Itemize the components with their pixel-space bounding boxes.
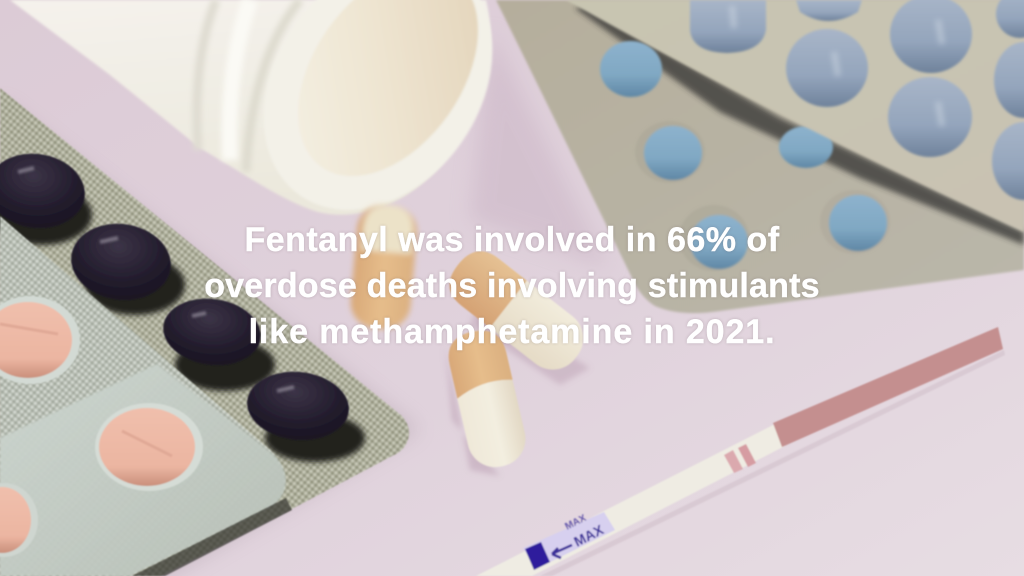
test strip	[476, 327, 1005, 576]
blue tablets	[600, 41, 890, 271]
blister pack: back, blue tablets	[496, 0, 1024, 313]
front foil with pink tablets	[0, 216, 292, 576]
test lines	[724, 450, 743, 473]
blister pack: left, dark capsules and pink tablets	[0, 88, 420, 576]
capsule: lower vertical	[443, 325, 531, 476]
capsule: upright, behind	[349, 203, 419, 331]
bottle ribs	[197, 0, 300, 172]
bottle rim and inner opening	[216, 0, 540, 254]
capsule: lying diagonally	[439, 241, 595, 385]
MAX marking area	[523, 512, 615, 569]
headline statistic: Fentanyl was involved in 66% of	[244, 221, 780, 259]
dark capsule pills	[0, 148, 365, 462]
headline statistic: overdose deaths involving stimulants	[204, 267, 820, 305]
blister shadow from front pack	[575, 5, 1024, 245]
test strip MAX labels	[563, 513, 607, 550]
headline statistic: like methamphetamine in 2021.	[249, 313, 775, 351]
test strip MAX labels: MAX	[571, 521, 607, 550]
test strip MAX labels: MAX	[563, 513, 588, 533]
headline statistic	[204, 221, 820, 351]
surface shading near bottle and blister	[470, 30, 610, 270]
pill bottle on its side	[10, 0, 540, 254]
blister pack: front, grey-blue tablets	[566, 0, 1024, 232]
